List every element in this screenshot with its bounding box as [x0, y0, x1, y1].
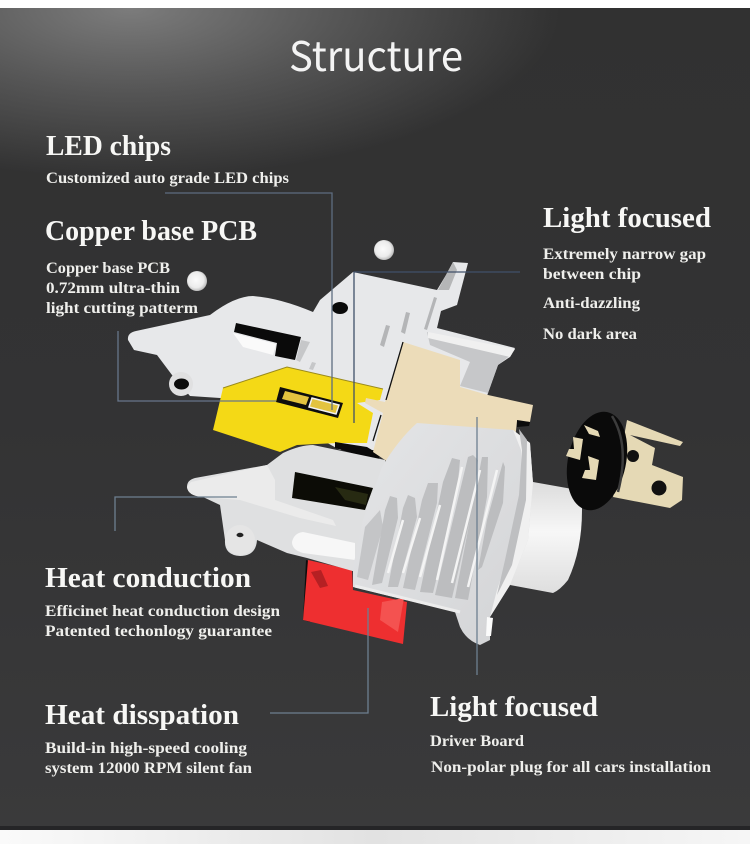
title: Structure	[289, 23, 463, 83]
block: Light focused upper: Light focused	[543, 203, 711, 234]
block: Heat conduction: Patented techonlogy guarantee	[45, 623, 272, 640]
block: Heat conduction: Heat conduction	[45, 563, 251, 594]
block: Light focused upper: No dark area	[543, 326, 637, 343]
block: LED chips	[46, 131, 289, 187]
leader: copper base PCB	[118, 331, 276, 401]
block: Copper base PCB: Copper base PCB	[46, 260, 170, 277]
block: Copper base PCB: light cutting patterm	[46, 300, 198, 317]
leader: light focused lower	[476, 417, 478, 675]
heatsink fins	[355, 455, 505, 612]
block: Light focused upper	[543, 203, 711, 343]
LED chips on PCB	[276, 387, 343, 418]
component: rear housing	[128, 262, 515, 450]
leader: heat conduction	[115, 497, 237, 531]
component: finned heatsink	[353, 423, 533, 645]
block: Light focused upper: Extremely narrow gap	[543, 246, 706, 263]
component: red fan	[303, 560, 407, 644]
block: Heat conduction	[45, 563, 280, 640]
component: yellow copper base PCB	[213, 367, 383, 461]
block: Light focused lower: Light focused	[430, 692, 598, 723]
leader: heat dissipation	[270, 608, 368, 713]
component: silver cylinder	[510, 482, 582, 593]
block: LED chips: LED chips	[46, 131, 171, 162]
dot: right floating screw	[374, 240, 394, 260]
block: Heat disspation: Heat disspation	[45, 700, 239, 731]
block: Copper base PCB: 0.72mm ultra-thin	[46, 280, 180, 297]
dot: left floating screw	[187, 271, 207, 291]
block: Light focused lower	[430, 692, 711, 776]
leader lines	[115, 193, 520, 713]
block: Copper base PCB	[45, 216, 257, 317]
leader: LED chips	[165, 193, 332, 410]
block: Light focused lower: Driver Board	[430, 733, 524, 750]
heatsink rim	[490, 429, 533, 617]
block: Copper base PCB: Copper base PCB	[45, 216, 257, 247]
block: LED chips: Customized auto grade LED chips	[46, 170, 289, 187]
exploded LED bulb diagram	[128, 240, 683, 645]
block: Heat disspation: system 12000 RPM silent fan	[45, 760, 252, 777]
block: Light focused lower: Non-polar plug for all cars installation	[431, 759, 711, 776]
block: Heat disspation	[45, 700, 252, 777]
component: front housing	[187, 445, 400, 572]
block: Light focused upper: Anti-dazzling	[543, 295, 640, 312]
block: Light focused upper: between chip	[543, 266, 641, 283]
block: Heat disspation: Build-in high-speed cooling	[45, 740, 247, 757]
leader: light focused upper	[354, 272, 520, 423]
component: beige driver board	[365, 342, 533, 470]
component: black plug with terminals	[558, 406, 683, 516]
block: Heat conduction: Efficinet heat conduction design	[45, 603, 280, 620]
